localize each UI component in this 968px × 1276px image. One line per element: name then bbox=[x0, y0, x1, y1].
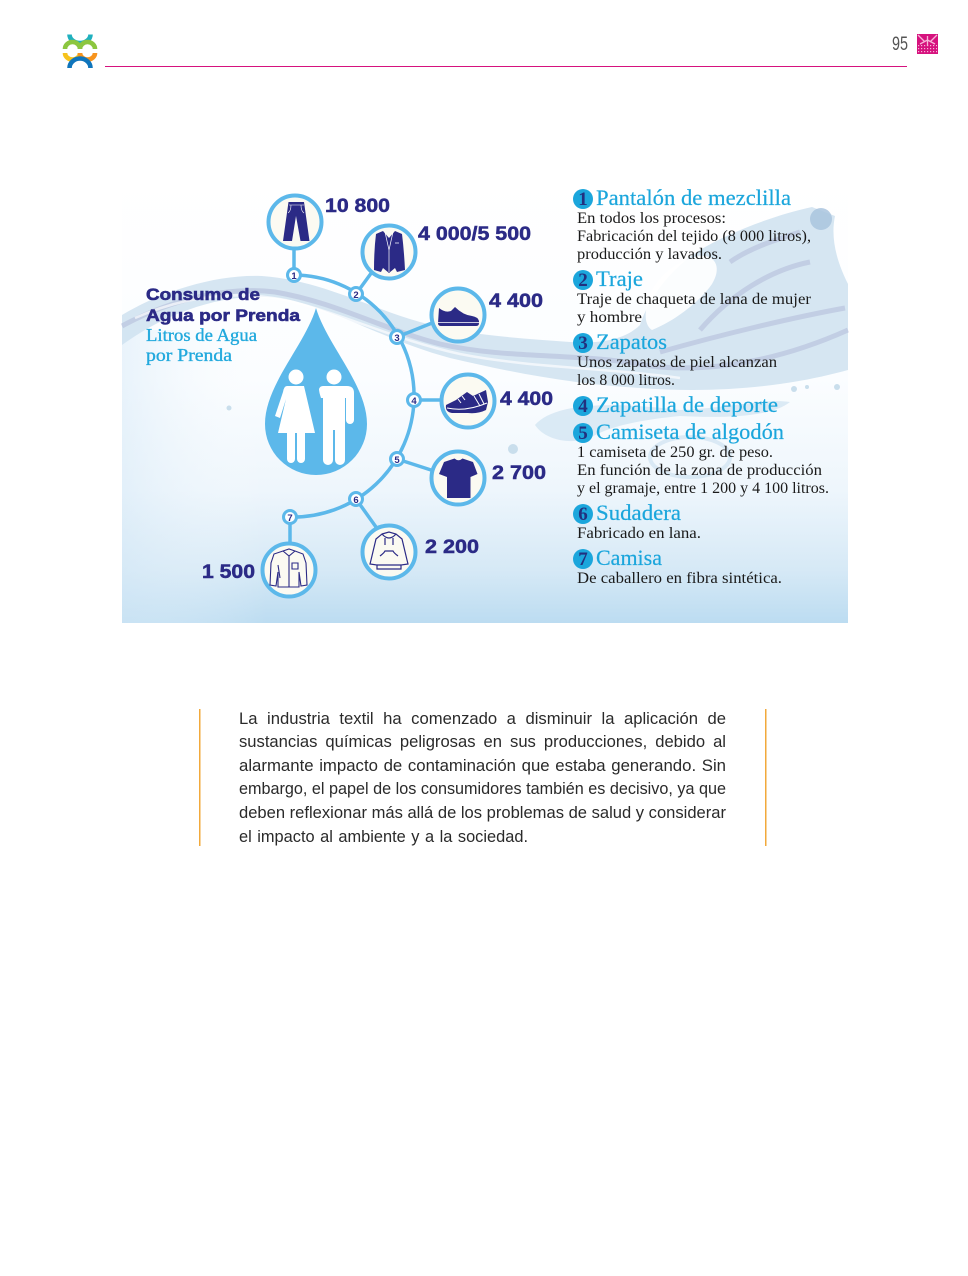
legend 7: Camisa bbox=[596, 545, 662, 570]
connector arc and branches bbox=[290, 250, 441, 545]
splash opening bbox=[646, 256, 717, 330]
header rule bbox=[105, 66, 907, 67]
legend 7: De caballero en fibra sintética. bbox=[577, 570, 782, 587]
legend 6: Sudadera bbox=[596, 500, 681, 525]
node markers bbox=[284, 268, 420, 524]
node markers: 7 bbox=[287, 513, 293, 524]
callout: right rule bbox=[765, 709, 766, 846]
icon: water drop with people bbox=[265, 308, 367, 475]
legend 5 bbox=[573, 419, 829, 497]
item 1: jeans: 10 800 bbox=[325, 195, 390, 217]
legend 6: Fabricado en lana. bbox=[577, 525, 701, 542]
subheading: Litros de Agua por Prenda: Litros de Agua bbox=[146, 325, 257, 345]
item 5: t-shirt: 2 700 bbox=[492, 462, 546, 484]
legend 3: 3 bbox=[578, 333, 588, 354]
item 2: suit bbox=[362, 223, 531, 278]
page number: 95 bbox=[892, 34, 908, 55]
node markers: 4 bbox=[411, 396, 417, 407]
callout text: alarmante impacto de contaminación que estaba generando. Sin bbox=[239, 756, 726, 775]
callout text bbox=[239, 709, 726, 846]
legend 3 bbox=[573, 329, 777, 389]
item 2: suit: 4 000/5 500 bbox=[418, 223, 531, 245]
item 3: shoe: 4 400 bbox=[489, 290, 543, 312]
callout text: el impacto al ambiente y a la sociedad. bbox=[239, 827, 528, 846]
icon: pink woven square bbox=[917, 34, 938, 54]
icon: woman bbox=[275, 370, 315, 463]
legend 1: Pantalón de mezclilla bbox=[596, 185, 791, 210]
legend 2: Traje bbox=[596, 266, 643, 291]
legend 1: Fabricación del tejido (8 000 litros), bbox=[577, 228, 811, 245]
callout text: La industria textil ha comenzado a disminuir la aplicación de bbox=[239, 709, 726, 728]
item 3: shoe bbox=[432, 288, 543, 342]
item 5: t-shirt bbox=[432, 452, 546, 504]
legend 1: producción y lavados. bbox=[577, 246, 722, 263]
callout: left rule bbox=[199, 709, 200, 846]
legend 1 bbox=[573, 185, 811, 263]
water wave bbox=[122, 207, 848, 477]
legend 5: y el gramaje, entre 1 200 y 4 100 litros. bbox=[577, 480, 829, 497]
item 4: sneaker bbox=[442, 374, 553, 428]
item 7: shirt bbox=[202, 544, 316, 596]
legend 5: 1 camiseta de 250 gr. de peso. bbox=[577, 444, 773, 461]
panel: infographic bbox=[122, 180, 848, 623]
legend 3: Unos zapatos de piel alcanzan bbox=[577, 354, 777, 371]
legend 3: los 8 000 litros. bbox=[577, 372, 675, 389]
callout text: embargo, el papel de los consumidores también es decisivo, ya que bbox=[239, 779, 726, 798]
item 4: sneaker: 4 400 bbox=[500, 388, 553, 410]
legend 2: 2 bbox=[578, 270, 588, 291]
legend 7 bbox=[573, 545, 782, 587]
legend 6 bbox=[573, 500, 701, 542]
legend 5: En función de la zona de producción bbox=[577, 462, 822, 479]
legend 2: y hombre bbox=[577, 309, 642, 326]
heading: Consumo de Agua por Prenda bbox=[146, 285, 301, 325]
node markers: 6 bbox=[353, 495, 359, 506]
callout text: sustancias químicas peligrosas en sus producciones, debido al bbox=[239, 732, 726, 751]
subheading: Litros de Agua por Prenda bbox=[146, 325, 257, 365]
legend 5: Camiseta de algodón bbox=[596, 419, 784, 444]
legend 6: 6 bbox=[578, 504, 588, 525]
node markers: 5 bbox=[394, 455, 400, 466]
legend 5: 5 bbox=[578, 423, 588, 444]
item 6: hoodie bbox=[362, 526, 479, 578]
legend 3: Zapatos bbox=[596, 329, 667, 354]
panel background bbox=[122, 180, 848, 623]
legend 2 bbox=[573, 266, 812, 326]
legend 2: Traje de chaqueta de lana de mujer bbox=[577, 291, 812, 308]
node markers: 2 bbox=[353, 290, 359, 301]
icon: man bbox=[319, 370, 354, 465]
node markers: 3 bbox=[394, 333, 400, 344]
icon: logo bbox=[65, 34, 95, 68]
callout text: deben reflexionar más allá de los problemas de salud y considerar bbox=[239, 803, 726, 822]
legend 7: 7 bbox=[578, 549, 588, 570]
item 6: hoodie: 2 200 bbox=[425, 536, 479, 558]
heading: Consumo de Agua por Prenda: Consumo de bbox=[146, 285, 260, 304]
panel side tint bbox=[122, 330, 848, 623]
legend 4: 4 bbox=[578, 396, 588, 417]
legend 1: En todos los procesos: bbox=[577, 210, 726, 227]
item 7: shirt: 1 500 bbox=[202, 561, 255, 583]
heading: Consumo de Agua por Prenda: Agua por Prenda bbox=[146, 306, 301, 325]
item 1: jeans bbox=[268, 195, 390, 248]
legend 4: Zapatilla de deporte bbox=[596, 392, 778, 417]
node markers: 1 bbox=[291, 271, 297, 282]
legend 1: 1 bbox=[578, 189, 588, 210]
subheading: Litros de Agua por Prenda: por Prenda bbox=[146, 345, 232, 365]
